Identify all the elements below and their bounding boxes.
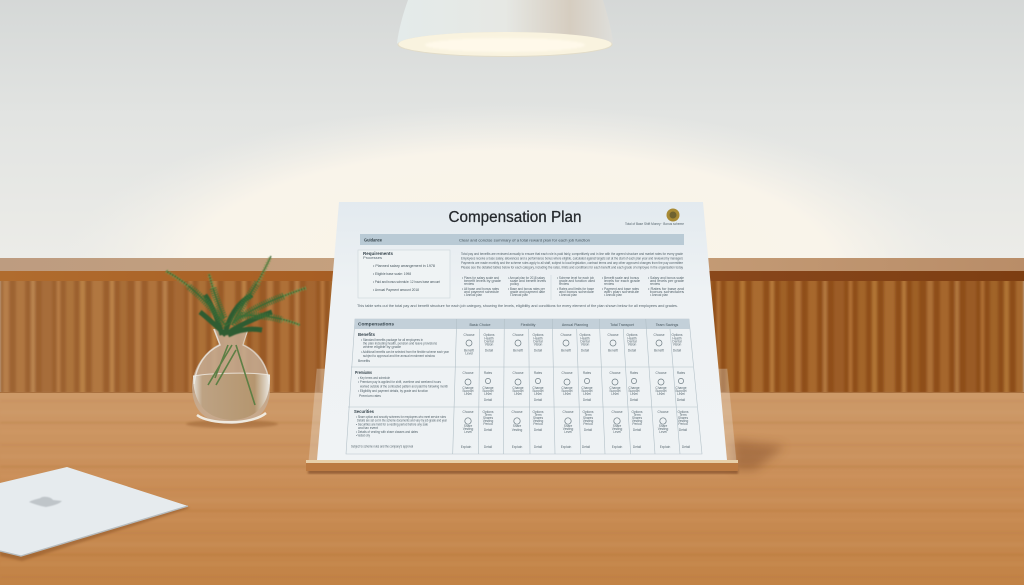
cells row 3: Detail [534, 445, 542, 449]
cells row 2: Level [514, 392, 522, 396]
cells row 1: Benefit [608, 348, 618, 352]
cells row 2: Rates [534, 371, 543, 375]
cells row 3: Detail [633, 428, 641, 432]
bullet columns: bonus schedules [650, 290, 685, 294]
cells row 2: Support [581, 389, 593, 393]
cells row 3: Vesting [512, 428, 522, 432]
table grid [348, 319, 697, 454]
cells row 2: Change [512, 386, 524, 390]
cells row 2: Support [482, 389, 494, 393]
vase water [193, 373, 270, 420]
cells row 3: Term [484, 413, 492, 417]
cells row 3: Options [482, 410, 494, 414]
cells row 1: Choose [560, 333, 572, 337]
bullet columns: • Salary and bonus scale [648, 276, 684, 280]
cells row 2: Detail [484, 398, 492, 402]
table header [354, 319, 690, 329]
cells row 1: Benefit [464, 348, 474, 352]
bullet columns [462, 275, 685, 300]
cells row 3: Vesting [678, 419, 688, 423]
cells row 1: Choose [464, 333, 475, 337]
cells row 2: Detail [677, 398, 685, 402]
cells row 1: Options [532, 333, 544, 337]
cells row 2: Level [484, 392, 492, 396]
cells row 1: Health [672, 336, 682, 340]
cells row 1: Dental [672, 340, 682, 344]
intro paragraph: Employees receive a base salary, allowances and a performance bonus where eligible, calculated against targets set at the start of each plan year and reviewed by managers [461, 256, 683, 260]
cells row 1: Dental [580, 340, 590, 344]
wooden table [0, 392, 1024, 585]
bullet columns: • Benefit scale and bonus [602, 276, 639, 280]
cells row 3: Level [564, 430, 572, 434]
cells row 1 [464, 333, 683, 356]
intro paragraph: Total pay and benefits are reviewed annually to ensure that each role is paid fairly, competitively and in line with the agreed structure and market rates for every grade [461, 252, 683, 256]
cells row 3: Share [659, 424, 667, 428]
guidance bar [360, 234, 684, 245]
cells row 1: Options [626, 333, 638, 337]
cells row 2: Support [532, 389, 544, 393]
summary box [358, 250, 450, 298]
cells row 3 [461, 410, 690, 449]
cells row 2: Change [482, 386, 494, 390]
cells row 2: Detail [534, 398, 542, 402]
cells row 2: Level [657, 392, 665, 396]
bullet columns: and payment schedule [464, 290, 499, 294]
summary box: Processes [363, 256, 383, 260]
bullet columns: • Base and bonus rates per [508, 287, 546, 291]
bullet columns: benefit levels by grade [464, 279, 501, 283]
bullet columns: • Rates for base and [648, 287, 684, 291]
bullet columns: and levels per grade [650, 279, 684, 283]
cells row 2: Rates [583, 371, 592, 375]
cells row 2: Support [628, 389, 640, 393]
cells row 3: Shares [632, 416, 642, 420]
cells row 2: Change [628, 386, 640, 390]
intro paragraph [461, 252, 683, 270]
cells row 2: Level [630, 392, 638, 396]
cells row 2: Change [655, 386, 667, 390]
pendant lamp [397, 0, 613, 57]
bullet columns: • Rates and limits for base [557, 287, 594, 291]
cells row 3: Vesting [483, 419, 493, 423]
cells row 1: Benefit [513, 348, 523, 352]
row: benefits: Benefits [358, 332, 375, 337]
summary box: • Planned salary arrangement in 1978 [373, 264, 435, 268]
cells row 3: Term [633, 413, 641, 417]
cells row 3: Term [534, 413, 542, 417]
acrylic stand [309, 369, 736, 460]
cells row 3: Vesting [632, 419, 642, 423]
row: securities: Securities [354, 409, 374, 414]
cells row 3: Vesting [583, 419, 593, 423]
cells row 3: Period [583, 422, 593, 426]
cells row 2: Rates [677, 371, 686, 375]
wall [0, 0, 1024, 435]
cells row 3: Choose [462, 410, 474, 414]
cells row 2: Detail [630, 398, 638, 402]
bullet columns: • Annual plan [604, 293, 622, 297]
cells row 3: Choose [512, 410, 523, 414]
cells row 3: Vesting [463, 427, 473, 431]
cells row 3: Shares [678, 416, 688, 420]
cells row 2: Level [611, 392, 619, 396]
cells row 2: Change [581, 386, 593, 390]
cells row 3: Share [513, 424, 521, 428]
cells row 3: Choose [658, 410, 669, 414]
cells row 3: Detail [679, 428, 687, 432]
cells row 3: Detail [584, 428, 592, 432]
summary box: • Eligible base scale: 1998 [373, 272, 411, 276]
note line: This table sets out the total pay and benefit structure for each job category, showing the levels, eligibility and conditions for every element of the plan shown below for all employees and grades. [357, 304, 678, 308]
cells row 2: Level [563, 392, 571, 396]
cells row 2: Choose [610, 371, 621, 375]
wood wainscot [0, 258, 1024, 394]
cells row 1: Choose [512, 333, 524, 337]
row: benefits: • Standard benefits package for all employees in [361, 338, 423, 342]
cells row 1: Choose [608, 333, 619, 337]
cells row 2: Choose [512, 371, 524, 375]
guidance bar: Guidance [364, 238, 382, 242]
display stand shadow [308, 440, 785, 474]
table body [346, 319, 702, 454]
cells row 1: Benefit [561, 348, 571, 352]
intro paragraph: Please see the detailed tables below for each category, including the rates, limits and conditions for each benefit and each grade of employee in the organisation today [461, 266, 683, 270]
cells row 2: Detail [583, 398, 591, 402]
cells row 1: Detail [673, 348, 681, 352]
bullet columns: • Annual plan [510, 293, 528, 297]
cells row 3: Share [564, 424, 572, 428]
cells row 1: Dental [484, 340, 494, 344]
row: premiums: worked outside of the contracted pattern and paid the following month [360, 384, 448, 388]
cells row 1: Level [465, 352, 473, 356]
summary box: • Paid and bonus schedule: 12 hours base amount [373, 280, 440, 284]
row: premiums: Premiums [355, 370, 372, 375]
cells row 1: Options [484, 333, 495, 337]
vase glass [192, 329, 270, 424]
bullet columns: and bonus schedule [559, 290, 594, 294]
table header: Compensations [358, 322, 394, 326]
row: premiums [355, 370, 448, 398]
cells row 1: Options [672, 333, 683, 337]
cells row 1: Detail [628, 348, 636, 352]
cells row 3: Vesting [612, 427, 622, 431]
cells row 3: Choose [612, 410, 623, 414]
table header: Team Savings [656, 323, 678, 327]
cells row 1: Dental [533, 340, 543, 344]
row: premiums: • Eligibility and payment details, by grade and function [358, 389, 428, 393]
cells row 3: Period [632, 422, 642, 426]
cells row 2: Change [675, 386, 687, 390]
cells row 2: Change [462, 386, 474, 390]
bullet columns: • Plans for salary scale and [462, 276, 499, 280]
cells row 2 [462, 371, 687, 402]
wooden stand base [306, 460, 738, 471]
bullet columns: review [604, 282, 615, 286]
logo seal [666, 208, 680, 222]
bullet columns: • Annual plan [559, 293, 577, 297]
cells row 3: Options [582, 410, 594, 414]
cells row 1: Benefit [654, 348, 664, 352]
compensation table [346, 319, 702, 454]
cells row 2: Change [561, 386, 573, 390]
row: securities: • Securities are held for a vesting period before any sale [356, 422, 428, 426]
cells row 3: Term [584, 413, 592, 417]
cells row 3: Options [678, 410, 689, 414]
cells row 1: Vision [628, 342, 637, 346]
bullet columns: • All base and bonus rates [462, 287, 499, 291]
cells row 2: Level [464, 392, 472, 396]
cells row 3: Period [483, 422, 493, 426]
cells row 3: Detail [484, 428, 492, 432]
row: benefits [358, 332, 450, 363]
cells row 3: Detail [682, 445, 690, 449]
cells row 3: Explain [612, 445, 622, 449]
row: securities: Details are set out in the scheme documents and vary by job grade and year [357, 418, 448, 422]
cells row 3: Level [659, 430, 667, 434]
row: benefits: • Additional benefits can be selected from the flexible scheme each year [361, 350, 450, 354]
row: benefits: subject to approval and the annual enrolment window [363, 354, 436, 358]
cells row 3: Shares [483, 416, 493, 420]
cells row 1: Health [580, 336, 590, 340]
row: benefits: the plan including health, pension and leave provisions [363, 342, 437, 346]
cells row 1: Choose [654, 333, 665, 337]
bullet columns: review [650, 282, 661, 286]
bullet columns: levels for each grade [604, 279, 640, 283]
cells row 3: Share [613, 424, 621, 428]
row: securities: • Vested only [356, 434, 370, 438]
cells row 3: Share [464, 424, 472, 428]
cells row 2: Support [675, 389, 687, 393]
cells row 3: Detail [484, 445, 492, 449]
cells row 1: Health [484, 336, 494, 340]
cells row 2: Support [462, 389, 474, 393]
cells row 2: Support [561, 389, 573, 393]
header note: Total of Base Shift Money · Bonus scheme [625, 222, 684, 226]
cells row 1: Detail [581, 348, 589, 352]
bullet columns: • Payment and base rates [602, 287, 639, 291]
row: premiums: • Premium pay is applied for shift, overtime and weekend hours [358, 380, 441, 384]
row: premiums: Premium rates [359, 394, 381, 398]
stems in water [208, 345, 255, 405]
bullet columns: grade and payment date [510, 290, 545, 294]
cells row 1: Detail [485, 348, 493, 352]
cells row 3: Shares [533, 416, 543, 420]
cells row 2: Rates [630, 371, 639, 375]
paper sheet [317, 202, 727, 460]
cells row 1: Vision [485, 342, 494, 346]
cells row 2: Level [534, 392, 542, 396]
row: benefits: Benefits [358, 359, 370, 363]
bullet columns: with plan schedule [604, 290, 639, 294]
cells row 3: Explain [512, 445, 522, 449]
cells row 2: Rates [484, 371, 493, 375]
cells row 3: Vesting [563, 427, 573, 431]
title: Compensation Plan [448, 209, 582, 226]
cells row 1: Detail [534, 348, 542, 352]
cells row 1: Vision [534, 342, 543, 346]
cells row 3: Options [632, 410, 643, 414]
row: securities: • Share option and security schemes for employees who meet service rules [356, 415, 446, 419]
cells row 2: Change [532, 386, 544, 390]
cells row 1: Dental [627, 340, 637, 344]
cells row 3: Level [613, 430, 621, 434]
cells row 3: Term [679, 413, 687, 417]
cells row 3: Explain [660, 445, 670, 449]
cells row 2: Choose [656, 371, 667, 375]
cells row 2: Choose [462, 371, 474, 375]
row: securities: and tax event [358, 426, 378, 430]
tablet [0, 467, 190, 561]
cells row 3: Options [532, 410, 544, 414]
row: premiums: • Key terms and schedule [358, 376, 390, 380]
row: securities: • Details of vesting with share classes and dates [356, 430, 418, 434]
bullet columns: review [559, 282, 570, 286]
intro paragraph: Payments are made monthly and the scheme rules apply to all staff, subject to local legislation, contract terms and any other approved changes from the pay committee [461, 261, 683, 265]
bullet columns: review [464, 282, 475, 286]
bullet columns: • Annual plan [464, 293, 482, 297]
bullet columns: grade and function used [559, 279, 595, 283]
cells row 3: Period [678, 422, 688, 426]
cells row 2: Support [609, 389, 621, 393]
cells row 3: Detail [633, 445, 641, 449]
table header: Basic Choice [470, 323, 490, 327]
bullet columns: • Annual plan for 2018 salary [508, 276, 545, 280]
cells row 3: Period [533, 422, 543, 426]
vase with greenery [166, 256, 306, 428]
cells row 1: Vision [673, 342, 682, 346]
cells row 2: Support [655, 389, 667, 393]
cells row 3: Level [464, 430, 472, 434]
cells row 2: Support [512, 389, 524, 393]
cells row 2: Choose [562, 371, 573, 375]
summary box: • Annual Payment amount 2018 [373, 288, 419, 292]
cells row 3: Shares [583, 416, 593, 420]
table header: Flexibility [521, 323, 536, 327]
row: benefits: where eligible by grade [363, 345, 401, 349]
table header: Annual Planning [562, 323, 588, 327]
cells row 2: Level [677, 392, 685, 396]
guidance bar: Clear and concise summary of a total reward plan for each job function [459, 238, 590, 242]
cells row 3: Detail [582, 445, 590, 449]
cells row 2: Change [609, 386, 621, 390]
cells row 1: Vision [581, 342, 590, 346]
cells row 3: Explain [461, 445, 471, 449]
cells row 2: Level [583, 392, 591, 396]
tablet logo [29, 497, 62, 507]
cells row 3: Explain [561, 445, 571, 449]
cells row 1: Options [580, 333, 591, 337]
row: securities [351, 409, 448, 448]
summary box: Requirements [363, 251, 393, 256]
cells row 3: Vesting [658, 427, 668, 431]
cells row 3: Choose [562, 410, 574, 414]
pine branches [166, 256, 306, 335]
cells row 3: Vesting [533, 419, 543, 423]
table header: Total Transport [610, 323, 634, 327]
cells row 1: Health [627, 336, 637, 340]
cells row 3: Detail [534, 428, 542, 432]
bullet columns: scale and benefit levels [510, 279, 546, 283]
bullet columns: policy [510, 282, 519, 286]
row: securities: Subject to scheme rules and the company's approval [351, 444, 413, 448]
bullet columns: • Annual plan [650, 293, 668, 297]
cells row 1: Health [533, 336, 543, 340]
bullet columns: • Scheme level for each job [557, 276, 594, 280]
